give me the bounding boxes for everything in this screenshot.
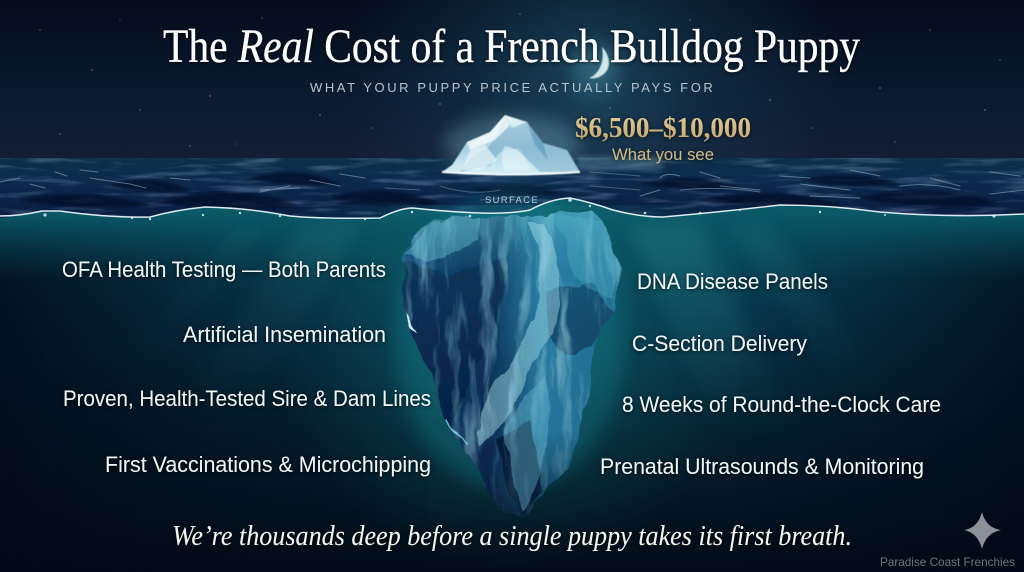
waterline xyxy=(0,198,1024,220)
label: vaccinations: First Vaccinations & Microchipping xyxy=(105,452,431,477)
surface label: SURFACE xyxy=(485,195,539,206)
price range: $6,500–$10,000 xyxy=(575,113,751,144)
subtitle: WHAT YOUR PUPPY PRICE ACTUALLY PAYS FOR xyxy=(310,80,715,95)
ocean surface xyxy=(0,156,1024,220)
iceberg above water xyxy=(442,115,580,175)
label: c-section: C-Section Delivery xyxy=(632,331,808,356)
label: proven lines: Proven, Health-Tested Sire & Dam Lines xyxy=(63,386,431,411)
price callout xyxy=(575,113,751,164)
label: DNA panels: DNA Disease Panels xyxy=(637,269,828,294)
moon xyxy=(574,44,618,92)
right cost labels xyxy=(600,269,941,479)
watermark: Paradise Coast Frenchies xyxy=(880,555,1015,569)
sky background xyxy=(0,0,1024,160)
iceberg below water xyxy=(395,190,630,525)
underwater background xyxy=(0,198,1024,572)
price caption: What you see xyxy=(612,145,714,164)
tagline: We’re thousands deep before a single puppy takes its first breath. xyxy=(172,521,852,552)
label: artificial insemination: Artificial Insemination xyxy=(183,322,386,347)
left cost labels xyxy=(62,257,431,477)
label: 8 weeks care: 8 Weeks of Round-the-Clock Care xyxy=(622,392,941,417)
title: The Real Cost of a French Bulldog Puppy xyxy=(163,20,860,73)
light rays xyxy=(90,225,900,440)
label: OFA health testing: OFA Health Testing — Both Parents xyxy=(62,257,386,282)
stars xyxy=(39,13,1001,147)
label: prenatal: Prenatal Ultrasounds & Monitoring xyxy=(600,454,924,479)
icon: sparkle xyxy=(964,512,1001,549)
